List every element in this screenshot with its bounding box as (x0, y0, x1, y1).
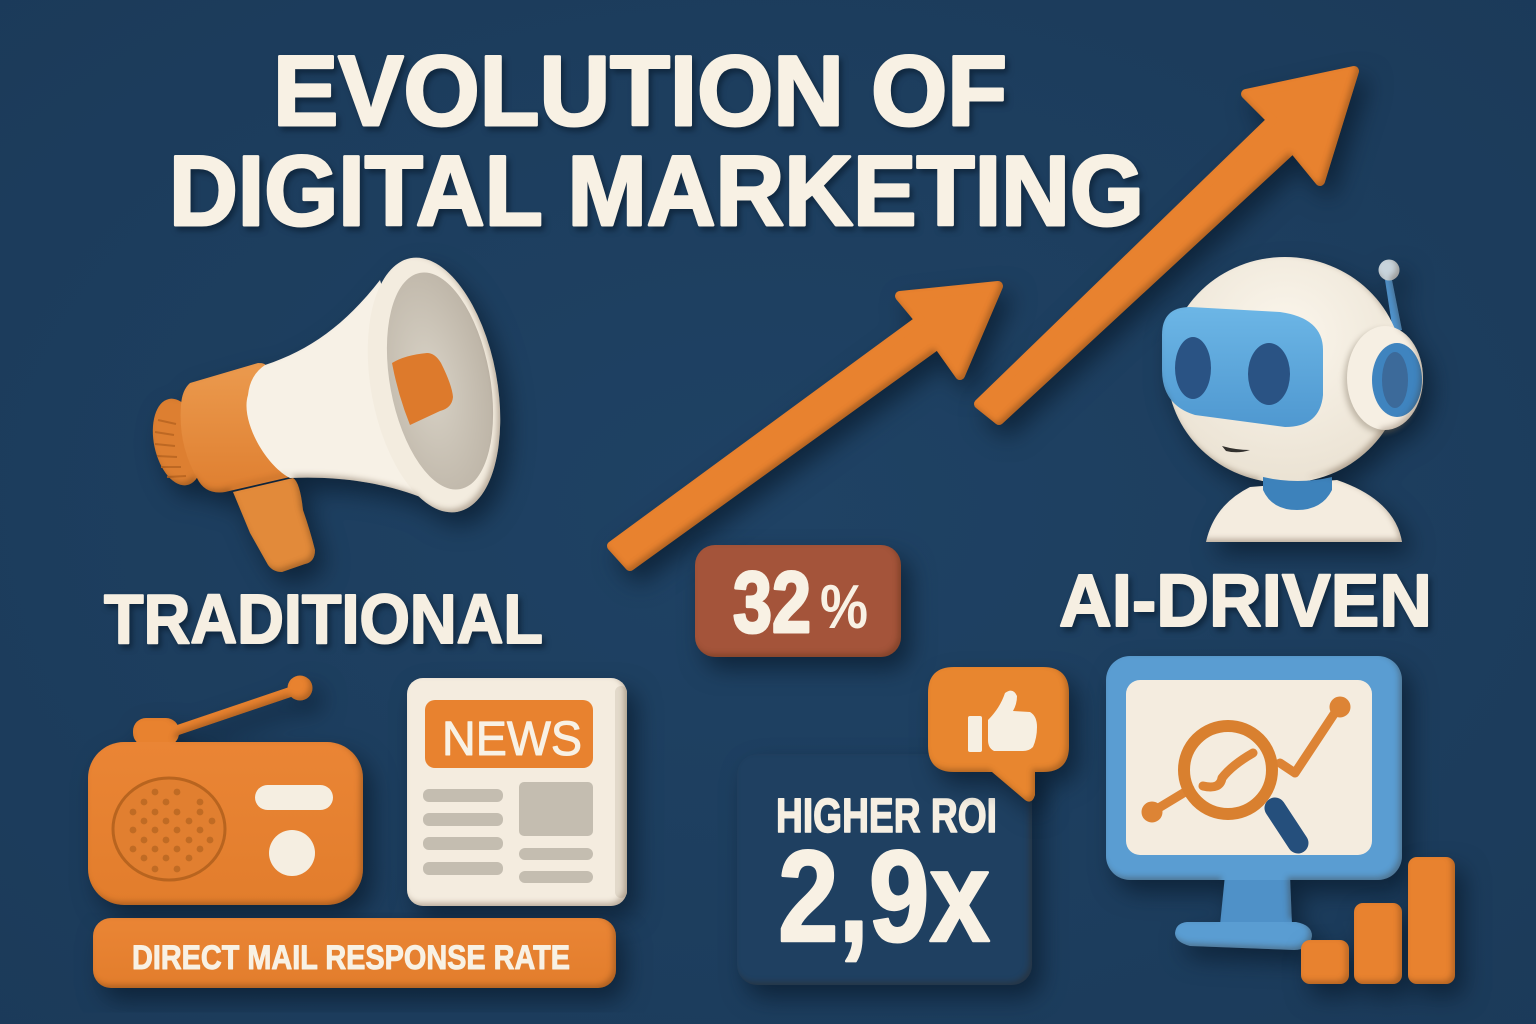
megaphone cone (246, 280, 450, 510)
badge: 32%: % (820, 573, 868, 642)
newspaper page edge (615, 686, 627, 898)
robot head (1167, 257, 1403, 483)
robot antenna (1378, 260, 1402, 332)
heading: traditional: TRADITIONAL (104, 580, 543, 658)
newspaper header (425, 700, 593, 768)
radio slider (255, 785, 333, 810)
newspaper picture (519, 782, 593, 836)
megaphone bell rim (349, 247, 519, 523)
megaphone rear cap (145, 394, 211, 490)
arrow: small growth arrow (612, 286, 998, 566)
thumb glyph (968, 691, 1037, 752)
robot right eye (1248, 343, 1290, 405)
radio knob (269, 830, 315, 876)
icon: thumbs-up speech bubble (928, 667, 1069, 802)
icon: robot (1162, 257, 1423, 542)
megaphone driver (392, 353, 453, 425)
line chart (1146, 701, 1346, 818)
badge: 32%: 32 (733, 555, 811, 651)
ROI value: 2,9x (778, 823, 990, 969)
monitor frame (1106, 656, 1402, 880)
panel: higher ROI (737, 754, 1032, 985)
label bar: direct mail response rate (93, 918, 616, 988)
robot body (1206, 480, 1402, 542)
newspaper headline: NEWS (442, 713, 582, 766)
megaphone bell interior (371, 264, 509, 498)
label bar: direct mail response rate: DIRECT MAIL RESPONSE RATE (132, 939, 570, 977)
ROI label: HIGHER ROI (776, 790, 997, 843)
arrow: large growth arrow (979, 71, 1354, 420)
radio antenna (133, 676, 312, 746)
robot ear (1347, 326, 1423, 430)
megaphone handle (233, 478, 315, 572)
monitor stand (1175, 875, 1312, 950)
robot visor (1162, 307, 1323, 427)
robot neck (1263, 477, 1332, 510)
radio speaker (113, 778, 225, 880)
magnifying glass (1184, 726, 1298, 843)
monitor screen (1126, 680, 1372, 855)
newspaper sheet (407, 678, 627, 906)
megaphone neck (181, 363, 290, 492)
radio body (88, 742, 363, 905)
icon: radio (88, 676, 363, 905)
heading: AI-driven: AI-DRIVEN (1059, 559, 1432, 642)
title: EVOLUTION OF (273, 35, 1007, 146)
robot left eye (1175, 337, 1211, 399)
robot mouth (1222, 446, 1250, 452)
title: DIGITAL MARKETING (169, 135, 1144, 246)
title (169, 35, 1144, 246)
icon: monitor with chart (1106, 656, 1402, 950)
bar chart: orange growth bars (1301, 857, 1455, 984)
badge: 32% (695, 545, 901, 657)
newspaper text lines (423, 789, 593, 883)
icon: newspaper (407, 678, 627, 906)
icon: megaphone (145, 247, 519, 572)
